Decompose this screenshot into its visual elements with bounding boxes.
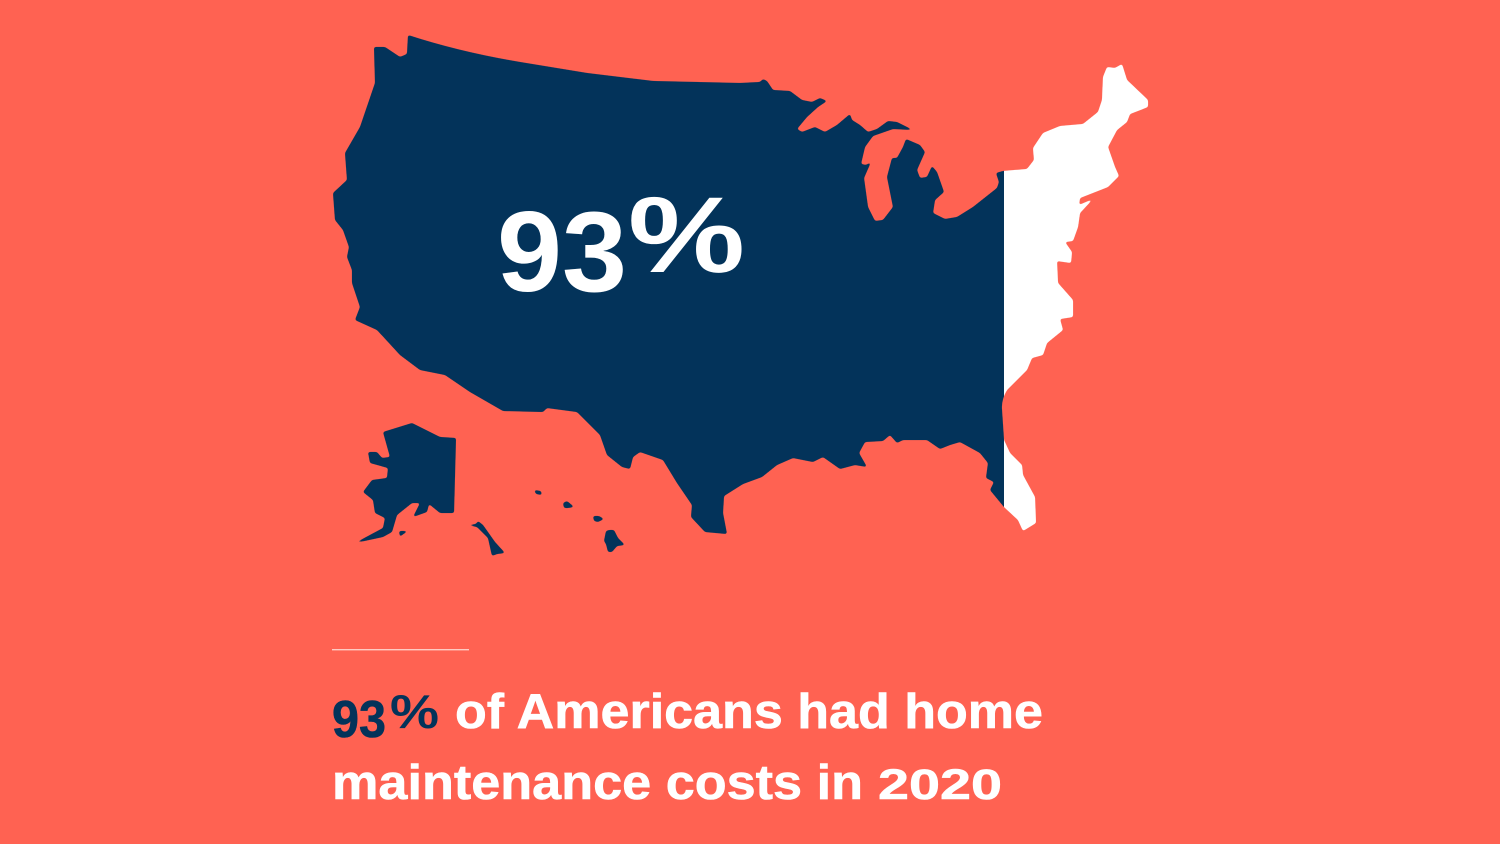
map: Alaska and Hawaii bbox=[355, 423, 625, 556]
map: contiguous United States, 93% filled bbox=[333, 35, 1148, 534]
big statistic: % bbox=[628, 174, 745, 295]
caption line 2: maintenance costs in bbox=[332, 756, 863, 810]
map: remaining white portion bbox=[1004, 64, 1148, 530]
caption line 1: % bbox=[390, 685, 439, 738]
caption heading bbox=[332, 685, 1043, 810]
Alaska mainland bbox=[355, 423, 456, 543]
Kodiak island bbox=[399, 531, 408, 537]
Hawaii islands bbox=[534, 490, 625, 552]
big statistic: 93 bbox=[497, 189, 627, 316]
caption line 2: 2020 bbox=[878, 761, 1002, 809]
caption rule bbox=[332, 649, 469, 650]
Alaska panhandle bbox=[467, 521, 505, 556]
map: filled navy portion bbox=[333, 36, 1004, 534]
caption line 1: 93 bbox=[332, 691, 386, 749]
caption line 1: of Americans had home bbox=[455, 685, 1043, 739]
